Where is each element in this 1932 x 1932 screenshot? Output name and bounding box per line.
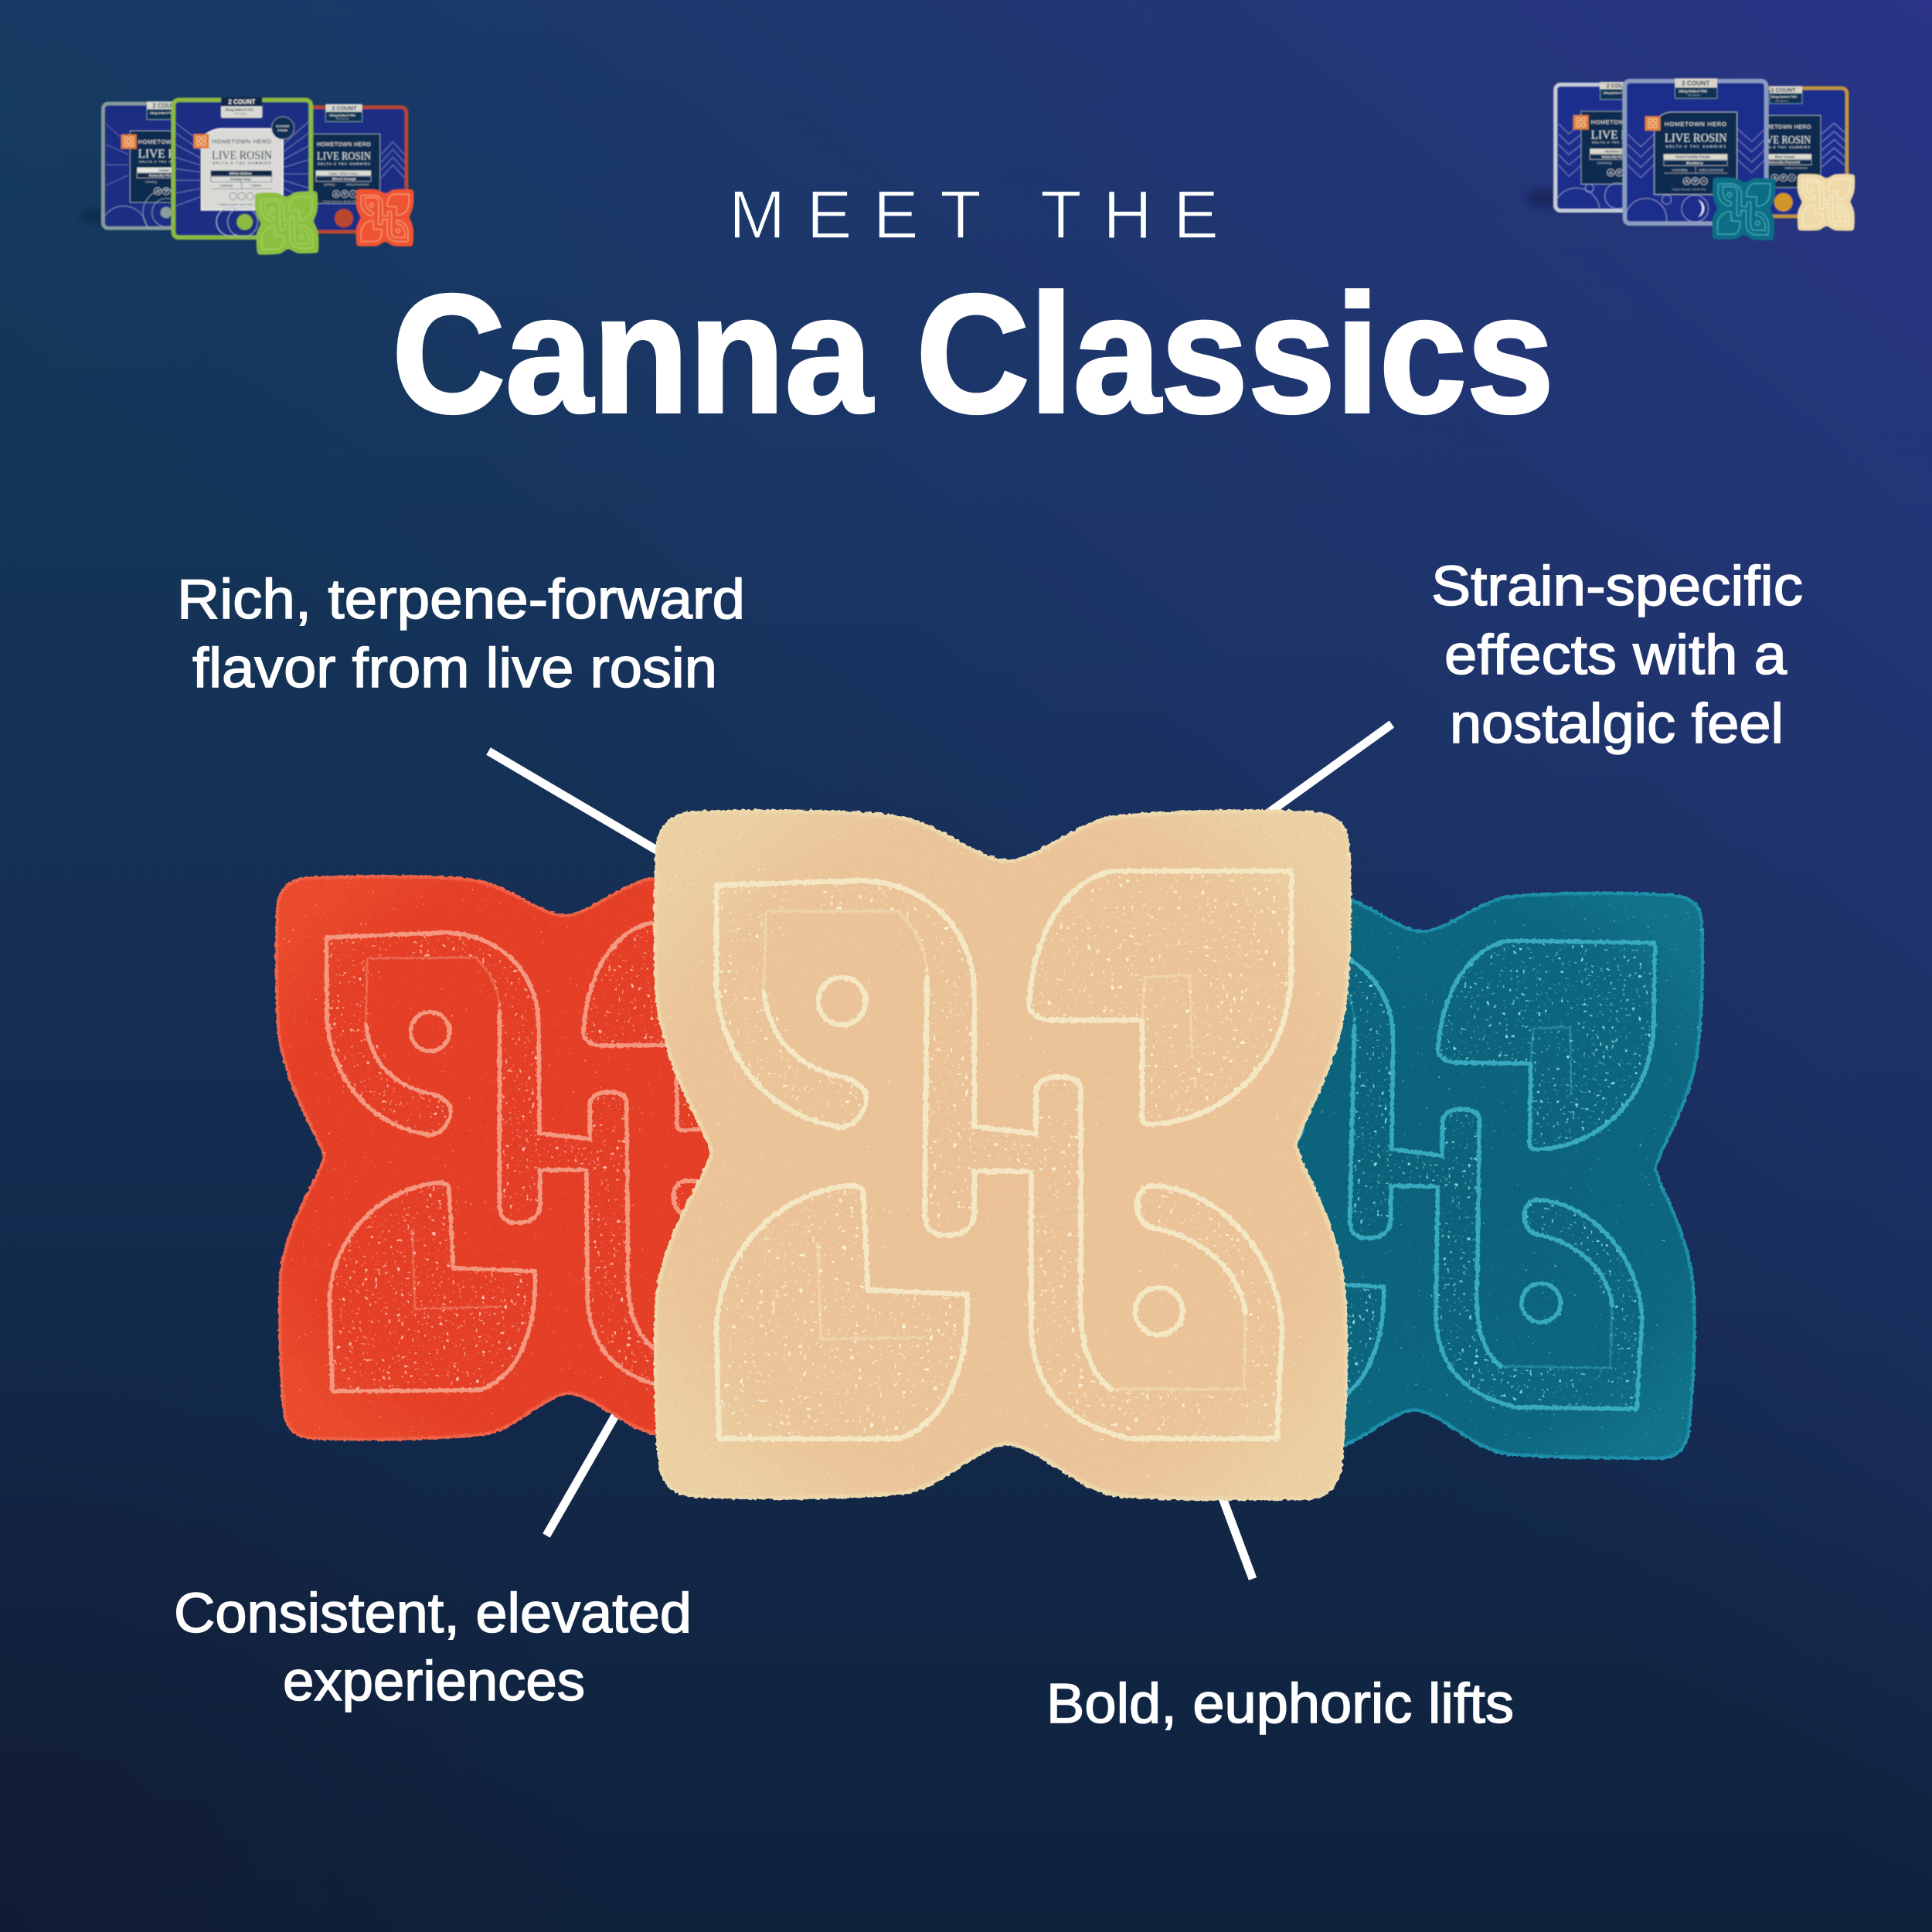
package: gold pack: Per Gummy <box>1776 99 1788 102</box>
package: grey pack: Gelato <box>158 168 170 172</box>
gummy: cream <box>655 811 1349 1498</box>
icon: red mini gummy <box>356 189 413 247</box>
icon: teal mini gummy <box>1712 177 1776 240</box>
title: meet the: MEET THE <box>729 176 1219 253</box>
package: grey pack: HOMETOWN HERO <box>138 138 197 145</box>
package: red pack: Super Silver Haze <box>328 172 358 175</box>
package: grey pack: 25mg Delta-9 THC <box>150 111 175 114</box>
product group: right packs with teal and cream gummies <box>1528 78 1855 240</box>
package: green pack: Per Gummy <box>234 112 247 115</box>
package: steel blue pack: Per Gummy <box>1688 94 1700 97</box>
package: red pack: DELTA-9 THC GUMMIES <box>318 162 370 166</box>
arrow: pointer lines <box>488 724 1392 1579</box>
callout text: effects <box>1431 556 1803 755</box>
package: red pack: 2 Vegan Gummies - Net Wt. 8.5g <box>322 199 356 202</box>
package: silver pack: Naturally Flavored <box>1602 155 1633 159</box>
package: gold pack <box>1736 86 1847 216</box>
package: green pack: HOMETOWN HERO <box>212 138 271 145</box>
package: steel blue pack <box>1624 78 1767 240</box>
callout text: flavor: Rich, terpene-forward <box>177 569 745 631</box>
package: grey pack: LIVE ROSIN <box>138 148 203 161</box>
package: red pack: 2 COUNT <box>332 105 357 112</box>
callout text: effects: nostalgic feel <box>1450 693 1784 755</box>
package: red pack: 25mg Delta-9 THC <box>329 114 355 117</box>
callout text: flavor: flavor from live rosin <box>192 638 717 699</box>
package: gold pack: 2 COUNT <box>1770 87 1796 94</box>
package: gold pack: 25mg Delta-9 THC <box>1770 95 1798 99</box>
gummy: teal <box>1125 886 1703 1459</box>
package: steel blue pack: Grand Daddy Purple <box>1675 155 1710 159</box>
package: green pack: FREE <box>277 128 288 132</box>
package: silver pack: Unwinding <box>1597 161 1611 165</box>
package: steel blue pack: DELTA-9 THC GUMMIES <box>1666 145 1726 148</box>
package: red pack: Uplifting <box>324 182 335 186</box>
package: red pack: Sativa Dominant <box>346 182 369 186</box>
callout text: flavor <box>177 569 745 699</box>
package: green pack: LIVE ROSIN <box>212 149 272 162</box>
icon: green gummy <box>254 191 319 255</box>
package: green pack: Hybrid <box>251 184 261 188</box>
package: red pack: Blood Orange <box>332 177 356 181</box>
package: silver pack: 25mg Delta-9 THC <box>1604 91 1628 94</box>
package: green pack: 2 Vegan Gummies - Net Wt. 8.5g <box>219 202 253 206</box>
package: grey pack <box>80 100 173 230</box>
package: red pack: Per Gummy <box>336 117 349 121</box>
package: green pack <box>173 97 311 237</box>
package: steel blue pack: Blueberry <box>1686 162 1703 165</box>
package: silver pack: LIVE ROSIN <box>1591 128 1656 141</box>
title: Canna Classics: Canna Classics <box>392 260 1554 448</box>
product group: left packs with green and red gummies <box>80 97 413 255</box>
package: gold pack: DELTA-9 THC GUMMIES <box>1757 145 1810 149</box>
callout text: consistency: experiences <box>283 1651 585 1713</box>
package: grey pack: DELTA-9 THC GUMMIES <box>139 160 189 164</box>
package: silver pack: Northern Lights <box>1605 150 1632 154</box>
package: green pack: Calming <box>220 184 233 188</box>
package: green pack: 25mg Delta-9 THC <box>225 107 253 111</box>
package: red pack <box>284 104 406 232</box>
package: green pack: White Widow <box>230 172 252 175</box>
callout text: consistency <box>174 1583 692 1713</box>
package: gold pack: HOMETOWN HERO <box>1757 125 1811 131</box>
package: green pack: SUGAR <box>276 124 290 128</box>
gummy: red <box>276 872 850 1440</box>
package: steel blue pack: Indica Dominant <box>1699 168 1724 172</box>
package: silver pack: HOMETOWN HERO <box>1591 118 1650 125</box>
package: gold pack: Blue Dream <box>1775 155 1795 158</box>
package: green pack: DELTA-9 THC GUMMIES <box>213 161 270 165</box>
package: grey pack: Calming <box>145 180 157 184</box>
package: green pack: 2 COUNT <box>228 99 255 106</box>
callout text: effects: Strain-specific <box>1431 556 1803 617</box>
package: red pack: LIVE ROSIN <box>317 151 371 163</box>
package: silver pack: 2 COUNT <box>1607 82 1631 89</box>
package: gold pack: Sativa Dominant <box>1784 166 1808 170</box>
package: grey pack: 2 COUNT <box>152 102 179 109</box>
callout text: effects: effects with a <box>1444 624 1787 686</box>
package: gold pack: LIVE ROSIN <box>1757 134 1811 146</box>
package: steel blue pack: 2 Vegan Gummies - Net Wt. 8.5g <box>1672 188 1706 191</box>
package: red pack: HOMETOWN HERO <box>317 142 371 148</box>
package: steel blue pack: 25mg Delta-9 THC <box>1679 89 1707 93</box>
icon: cream mini gummy <box>1798 174 1855 231</box>
package: steel blue pack: HOMETOWN HERO <box>1665 121 1726 128</box>
callout text: consistency: Consistent, elevated <box>174 1583 692 1645</box>
package: green pack: Prickly Pear <box>230 177 251 181</box>
package: steel blue pack: 2 COUNT <box>1682 79 1710 87</box>
package: silver pack <box>1528 82 1664 234</box>
package: gold pack: Naturally Flavored <box>1768 161 1800 165</box>
callout text: euphoric lifts: Bold, euphoric lifts <box>1046 1673 1514 1735</box>
package: grey pack: Naturally Flavored <box>149 174 180 178</box>
package: steel blue pack: Unwinding <box>1672 168 1688 172</box>
package: silver pack: DELTA-9 THC GUMMIES <box>1592 140 1642 144</box>
package: steel blue pack: LIVE ROSIN <box>1665 132 1727 145</box>
